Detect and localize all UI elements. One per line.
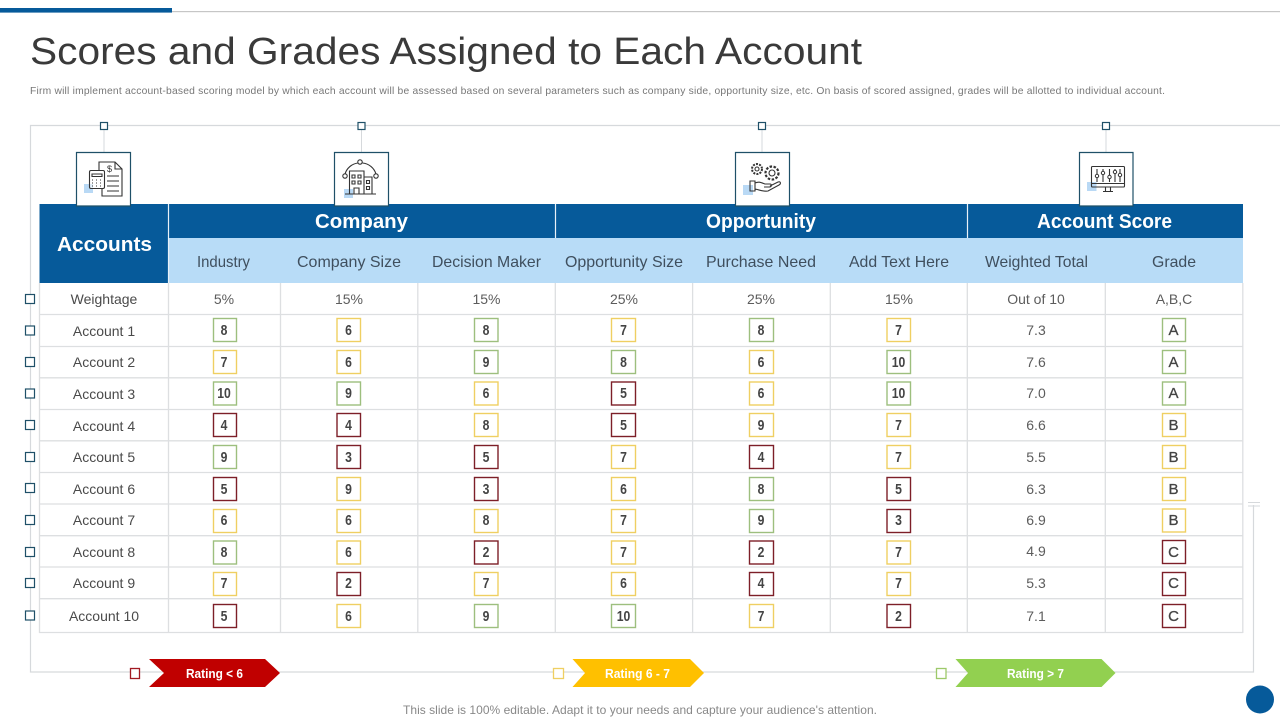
row: Account 6: Account 6 [73,481,135,497]
row: Account 9: Account 9 [73,575,135,591]
row: Weightage [71,291,1192,307]
row: Account 8: 4.9 [1026,543,1046,559]
row: Account 1 [73,318,1186,342]
row: Account 2 [73,350,1186,374]
row: Account 4: 8 [483,417,490,433]
top accent bar [0,8,1280,13]
row: Account 5: 7 [620,449,627,465]
sub-headings: Add Text Here [849,254,949,271]
row: Account 4: 9 [758,417,764,433]
row: Account 2: 9 [483,354,489,370]
title: Scores and Grades Assigned to Each Account [30,31,862,73]
row: Account 1: 7 [895,322,902,338]
row: Account 10: Account 10 [69,608,139,624]
row: Account 9: 6 [620,575,627,591]
row: Account 7: Account 7 [73,512,135,528]
row: Account 7: 8 [483,512,490,528]
row: Account 8: 2 [758,544,764,560]
top connector markers [100,122,1110,130]
row: Account 10: 6 [345,608,352,624]
row: Account 3: 5 [620,385,627,401]
row: Weightage: Weightage [71,291,138,307]
row: Account 4: 7 [895,417,902,433]
row: Weightage: 25% [747,291,775,307]
row: Account 1: A [1168,322,1179,339]
row: Account 4: 6.6 [1026,417,1046,433]
row: Account 7: 6 [221,512,227,528]
row: Account 4: 4 [345,417,352,433]
row: Account 2: 6 [758,354,764,370]
sub-headings: Industry [197,254,250,271]
legend: rating below 6: Rating < 6 [186,666,243,681]
row: Account 2: 8 [620,354,627,370]
row: Account 7: 6 [345,512,352,528]
row: Account 3: 6 [758,385,764,401]
row: Account 10: 9 [483,608,489,624]
row: Account 5: 9 [221,449,227,465]
row: Account 9: 2 [345,575,352,591]
legend: rating below 6 [130,659,280,687]
row: Account 7 [73,509,1186,532]
row: Account 6 [73,478,1186,500]
row: Account 6: 9 [345,481,352,497]
row: Account 1: 7.3 [1026,322,1046,338]
row: Account 2: 6 [345,354,352,370]
sub-headings: Weighted Total [985,254,1088,271]
row: Account 2: 10 [892,354,905,370]
page number badge [1246,686,1274,714]
heading: Accounts: Accounts [57,234,152,256]
sub-headings: Company Size [297,254,401,271]
sub-headings: Grade [1152,254,1196,271]
row: Account 6: B [1168,481,1179,498]
row: Account 3 [73,382,1186,405]
row: Account 2: 7 [221,354,227,370]
row: Account 5: 3 [345,449,352,465]
row: Weightage: 5% [214,291,234,307]
row: Account 9: C [1168,575,1179,592]
row: Account 1: 8 [758,322,765,338]
row: Weightage: 15% [335,291,363,307]
row: Account 8: 7 [895,544,902,560]
row: Account 9: 4 [758,575,765,591]
row: Account 9: 7 [895,575,902,591]
row: Account 5: 7 [895,449,902,465]
subtitle text: Firm will implement account-based scoring model by which each account will be assessed based on several parameters such as company side, opportunity size, etc. On basis of scored assigned, grades will be allotted to individual account. [30,86,1165,97]
row: Account 7: B [1168,512,1179,529]
left row markers [26,294,34,620]
row: Account 6: 6.3 [1026,481,1046,497]
row: Account 7: 9 [758,512,764,528]
row: Account 2: A [1168,354,1179,371]
row: Account 1: 8 [483,322,490,338]
row: Account 10: 5 [221,608,228,624]
row: Account 5: Account 5 [73,449,135,465]
row: Account 3: 9 [345,385,352,401]
row: Weightage: 15% [885,291,913,307]
row: Weightage: 15% [472,291,501,307]
icon: calculator and invoice: $ [107,164,112,174]
row: Weightage: A,B,C [1156,291,1192,307]
outer frame lines [30,126,1280,672]
row: Account 3: 7.0 [1026,385,1046,401]
icon: calculator and invoice [76,152,130,206]
icon: gears over hand [736,152,790,206]
row: Account 4 [73,414,1186,436]
row: Account 6: 5 [221,481,228,497]
row: Account 1: 6 [345,322,352,338]
row: Account 3: A [1168,385,1179,402]
row: Account 10 [69,604,1186,628]
row: Account 6: 8 [758,481,765,497]
row: Account 5: 5.5 [1026,449,1046,465]
icon: building with network arc [334,152,388,206]
icon: monitor with sliders [1080,152,1133,206]
row: Account 10: 7.1 [1026,608,1046,624]
footer note: This slide is 100% editable. Adapt it to your needs and capture your audience's attention. [403,703,877,717]
row: Account 3: 10 [892,385,905,401]
table grid [39,283,1243,633]
legend: rating above 7: Rating > 7 [1007,666,1064,681]
row: Account 3: Account 3 [73,386,135,402]
row: Weightage: Out of 10 [1007,291,1065,307]
row: Account 9: 5.3 [1026,575,1046,591]
row: Account 4: Account 4 [73,418,135,434]
row: Account 9: 7 [483,575,489,591]
sub-headings: Decision Maker [432,254,542,271]
row: Account 4: 5 [620,417,627,433]
row: Account 4: B [1168,417,1179,434]
row: Account 8 [73,540,1186,564]
row: Account 5: B [1168,449,1179,466]
row: Account 8: 8 [221,544,228,560]
row: Account 8: 2 [483,544,489,560]
row: Account 8: 7 [620,544,627,560]
row: Account 10: 2 [895,608,902,624]
row: Account 7: 6.9 [1026,512,1046,528]
row: Account 3: 6 [483,385,489,401]
row: Account 6: 3 [483,481,489,497]
row: Account 8: Account 8 [73,544,135,560]
sub-headings: Opportunity Size [565,254,683,271]
row: Account 6: 5 [895,481,902,497]
row: Account 8: C [1168,544,1179,561]
row: Account 8: 6 [345,544,352,560]
row: Account 2: 7.6 [1026,354,1046,370]
row: Account 4: 4 [221,417,228,433]
row: Account 7: 3 [895,512,902,528]
row: Account 3: 10 [217,385,231,401]
row: Account 10: 10 [617,608,630,624]
row: Weightage: 25% [610,291,638,307]
row: Account 9 [73,572,1186,596]
sub-headings [197,254,1196,271]
row: Account 2: Account 2 [73,354,135,370]
heading: Opportunity: Opportunity [706,211,817,233]
row: Account 1: 7 [620,322,627,338]
row: Account 10: 7 [758,608,764,624]
row: Account 5: 5 [483,449,490,465]
row: Account 7: 7 [620,512,627,528]
heading: Account Score: Account Score [1037,211,1172,233]
row: Account 5 [73,446,1186,468]
legend: rating 6 to 7: Rating 6 - 7 [605,666,670,681]
row: Account 5: 4 [758,449,765,465]
row: Account 9: 7 [221,575,227,591]
row: Account 10: C [1168,608,1179,625]
legend: rating above 7 [936,659,1116,687]
heading: Company: Company [315,211,409,233]
row: Account 6: 6 [620,481,627,497]
table header [40,204,1243,283]
sub-headings: Purchase Need [706,254,816,271]
legend: rating 6 to 7 [554,659,704,687]
row: Account 1: Account 1 [73,323,135,339]
row: Account 1: 8 [221,322,228,338]
